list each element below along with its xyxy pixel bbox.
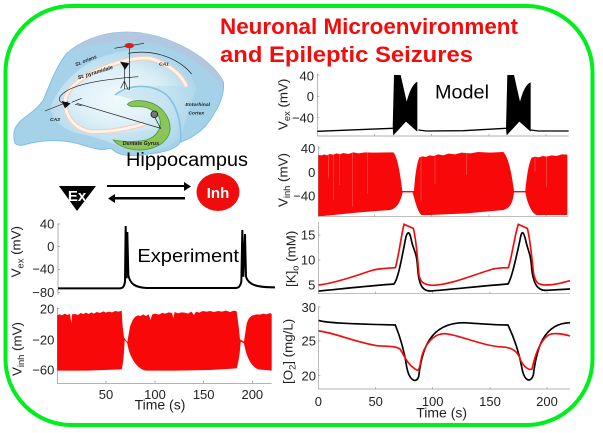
experiment Vinh chart: 200 bbox=[241, 387, 263, 402]
potassium chart: 5 bbox=[308, 278, 315, 293]
hippocampus upper cortical band bbox=[67, 32, 223, 88]
pyramidal cell layer bbox=[65, 58, 187, 132]
hippocampus region labels: Dentate Gyrus bbox=[123, 141, 159, 147]
hippocampus inner light area bbox=[63, 58, 187, 133]
model Vex chart: V bbox=[275, 121, 290, 130]
title: Neuronal Microenvironment bbox=[220, 14, 519, 39]
hippocampus region labels: Entorhinal bbox=[185, 102, 211, 108]
oxygen chart: 50 bbox=[368, 394, 383, 409]
oxygen chart: [O bbox=[281, 370, 296, 384]
potassium chart: 10 bbox=[301, 253, 315, 268]
experiment Vinh chart: 150 bbox=[193, 387, 215, 402]
experiment charts bbox=[9, 216, 275, 412]
excitatory neuron icon: Ex bbox=[68, 188, 87, 205]
experiment Vinh chart: 100 bbox=[144, 387, 166, 402]
experiment Vinh chart: inh bbox=[16, 355, 26, 367]
inhibitory neuron icon: Inh bbox=[207, 185, 229, 202]
model Vinh chart: 40 bbox=[301, 141, 315, 156]
experiment Vex chart: V bbox=[9, 268, 24, 277]
experiment Vex chart: Experiment bbox=[137, 245, 240, 266]
experiment Vex chart: −80 bbox=[32, 285, 54, 300]
experiment Vex chart: (mV) bbox=[9, 226, 24, 259]
model potassium and oxygen charts bbox=[281, 222, 570, 420]
hippocampus region labels: St. pyramidale bbox=[77, 65, 114, 81]
potassium chart bbox=[284, 222, 570, 294]
hippocampus region labels: Cortex bbox=[188, 110, 204, 116]
hippocampus label: Hippocampus bbox=[126, 150, 248, 171]
dentate gyrus bbox=[113, 101, 170, 150]
oxygen chart bbox=[281, 300, 570, 420]
model Vinh chart: (mV) bbox=[275, 153, 290, 186]
potassium chart: o bbox=[290, 265, 300, 271]
model Vex chart bbox=[275, 68, 569, 136]
experiment Vex chart: 0 bbox=[47, 239, 54, 254]
hippocampus illustration bbox=[14, 32, 224, 155]
experiment Vinh chart: −60 bbox=[32, 362, 54, 377]
experiment Vex chart bbox=[9, 216, 275, 300]
oxygen chart: 20 bbox=[302, 369, 316, 384]
oxygen chart: 200 bbox=[536, 394, 558, 409]
experiment Vinh chart: (mV) bbox=[9, 322, 24, 355]
experiment Vinh chart: 20 bbox=[40, 302, 54, 317]
title: and Epileptic Seizures bbox=[220, 42, 473, 67]
potassium chart: [K] bbox=[284, 271, 299, 287]
arrows between neurons bbox=[107, 182, 191, 203]
inhibitory neuron icon bbox=[196, 173, 240, 211]
oxygen chart: 150 bbox=[479, 394, 501, 409]
hippocampus region labels: CA1 bbox=[159, 62, 169, 68]
hippocampus region labels: St. oriens bbox=[75, 54, 98, 68]
model Vinh chart: −40 bbox=[293, 188, 315, 203]
model Vex chart: −40 bbox=[292, 110, 314, 125]
experiment Vinh chart: −20 bbox=[32, 332, 54, 347]
oxygen chart: 0 bbox=[315, 394, 322, 409]
model Vex chart: 0 bbox=[307, 89, 314, 104]
oxygen chart: 2 bbox=[287, 365, 297, 370]
experiment Vinh chart: V bbox=[9, 367, 24, 376]
inner arc bbox=[115, 86, 181, 142]
potassium chart: 15 bbox=[301, 227, 315, 242]
model Vex chart: (mV) bbox=[275, 79, 290, 111]
experiment Vex chart: 40 bbox=[40, 216, 54, 231]
excitatory neuron icon bbox=[59, 186, 96, 211]
model Vinh chart: V bbox=[275, 198, 290, 207]
hippocampus region labels bbox=[50, 54, 211, 147]
experiment Vinh red trace bbox=[57, 311, 272, 371]
experiment Vinh chart: 50 bbox=[99, 387, 113, 402]
model Vinh chart: 0 bbox=[308, 165, 315, 180]
model Vinh chart: inh bbox=[282, 186, 292, 198]
oxygen chart: Time (s) bbox=[416, 404, 467, 420]
oxygen chart: 25 bbox=[302, 334, 316, 349]
oxygen chart: 30 bbox=[302, 300, 316, 315]
hippocampus region labels: CA3 bbox=[50, 117, 60, 123]
model Vinh chart bbox=[275, 141, 568, 217]
potassium chart: (mM) bbox=[284, 231, 299, 265]
model Vex chart: Model bbox=[435, 82, 489, 103]
neuron circuit lines bbox=[45, 43, 192, 128]
model voltage charts bbox=[275, 68, 569, 217]
title bbox=[220, 14, 519, 67]
oxygen chart: ] (mg/L) bbox=[281, 319, 296, 365]
experiment Vinh chart bbox=[9, 302, 272, 412]
oxygen chart: 100 bbox=[422, 394, 444, 409]
experiment Vinh chart: Time (s) bbox=[135, 396, 185, 412]
experiment Vex chart: −40 bbox=[32, 262, 54, 277]
experiment Vex chart: ex bbox=[15, 258, 25, 268]
model Vex chart: 40 bbox=[300, 68, 314, 83]
model Vex chart: ex bbox=[282, 111, 292, 121]
